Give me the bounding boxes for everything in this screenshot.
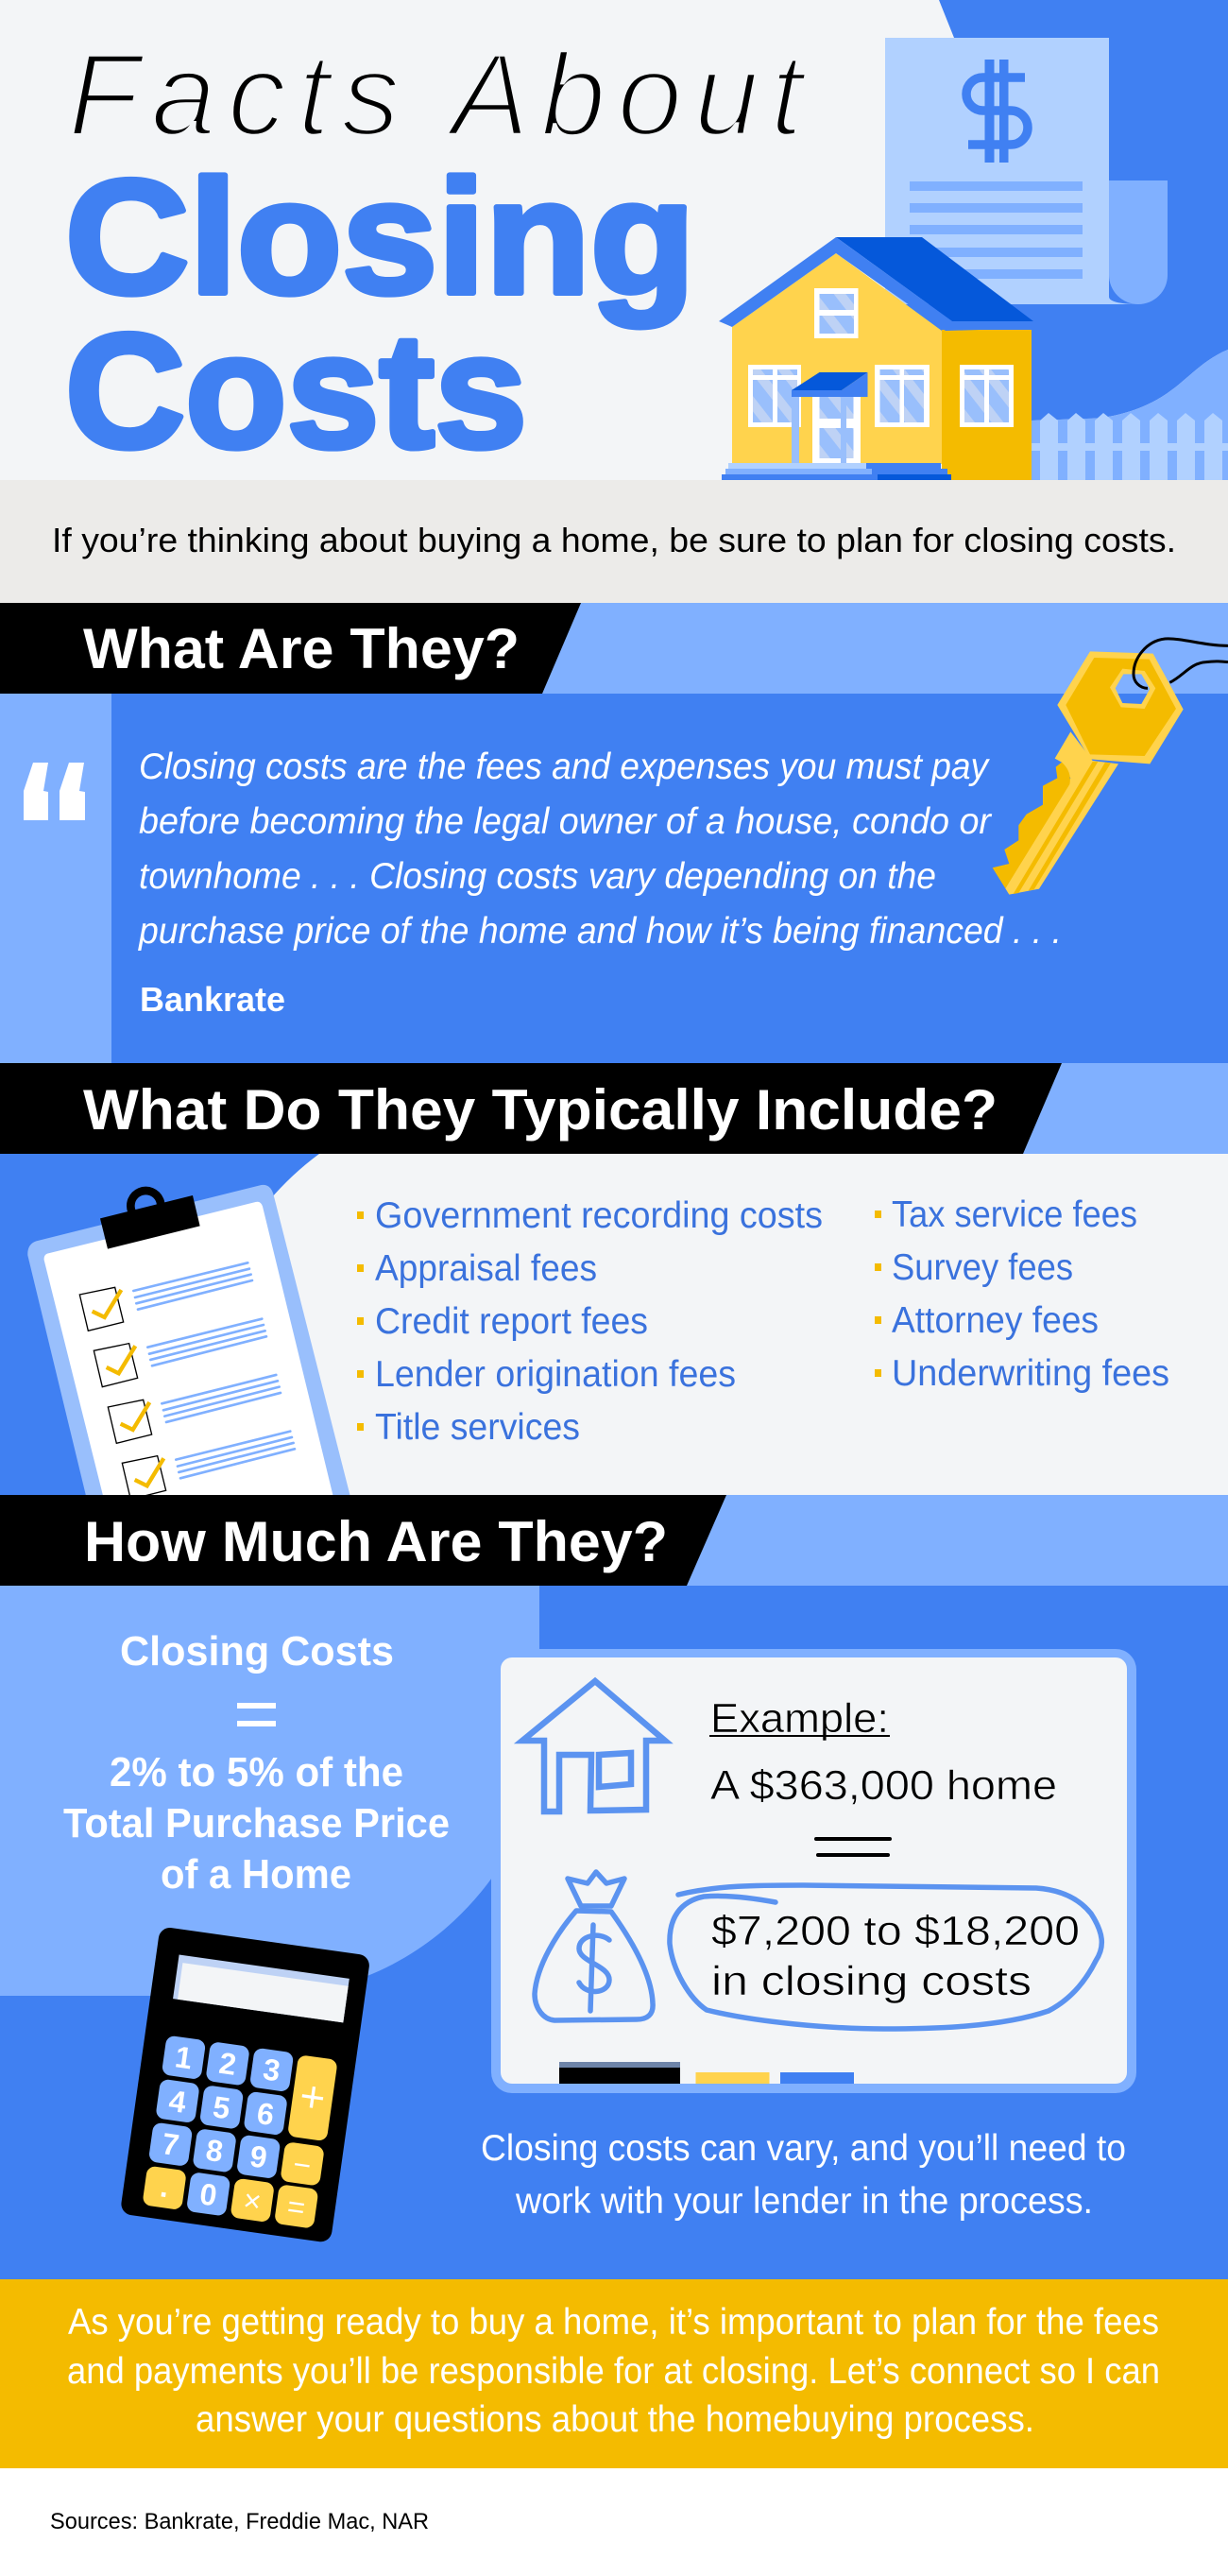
bullet list: left column: Government recording costs: [375, 1195, 823, 1236]
front door and porch: [792, 372, 867, 463]
section: what do they typically include: [0, 1063, 1228, 1531]
number keys: [142, 2035, 294, 2223]
icon: money bag: [535, 1872, 653, 2020]
quote text: Closing costs are the fees and expenses you must pay: [139, 747, 990, 787]
intro strip: [0, 480, 1228, 603]
bullet list: right column: Survey fees: [892, 1247, 1073, 1288]
key labels: 9: [247, 2138, 269, 2174]
checklist rows: [79, 1262, 252, 1331]
heading banner: What Are They?: [0, 603, 581, 694]
formula text: [63, 1628, 450, 1898]
key labels: 2: [217, 2046, 238, 2082]
upper window: [814, 288, 858, 338]
icon: yellow house: [719, 237, 1043, 480]
key labels: ×: [241, 2183, 264, 2219]
blue background blob: [850, 0, 1228, 421]
operator keys: [142, 2035, 338, 2229]
light blue ground shape: [1032, 350, 1228, 480]
handwritten equals: [816, 1839, 890, 1855]
quote text: [138, 747, 1062, 952]
key labels: 8: [204, 2133, 225, 2169]
porch steps: [722, 463, 951, 480]
caption: Closing costs can vary, and you’ll need to: [481, 2128, 1126, 2169]
title line: Costs: Costs: [65, 301, 527, 482]
header panel: [0, 0, 1228, 480]
title line: Closing: Closing: [65, 146, 695, 328]
bullet list: left column: Appraisal fees: [375, 1248, 597, 1289]
middle window: [875, 365, 930, 427]
formula text: 2% to 5% of the: [110, 1749, 403, 1795]
formula text: Closing Costs: [120, 1628, 394, 1674]
heading banner: How Much Are They?: How Much Are They?: [84, 1510, 668, 1573]
bullet list: right column: Attorney fees: [892, 1300, 1099, 1341]
bullet list: right column: Underwriting fees: [892, 1353, 1169, 1394]
formula text: of a Home: [161, 1851, 351, 1898]
key labels: 4: [167, 2084, 188, 2120]
bullet list: right column: Tax service fees: [892, 1194, 1137, 1235]
call to action text: answer your questions about the homebuying process.: [196, 2399, 1034, 2440]
bullet list: left column: Title services: [375, 1407, 580, 1448]
quote attribution: Bankrate: [140, 980, 285, 1019]
heading banner: What Do They Typically Include?: What Do They Typically Include?: [83, 1078, 998, 1142]
key labels: 1: [173, 2039, 195, 2075]
example price: A $363,000 home: [710, 1762, 1057, 1809]
call to action text: and payments you’ll be responsible for at closing. Let’s connect so I can: [67, 2351, 1160, 2392]
bullet list: left column: [357, 1195, 823, 1448]
key labels: 0: [197, 2176, 219, 2212]
example result: $7,200 to $18,200: [711, 1908, 1080, 1954]
call to action text: [67, 2302, 1160, 2440]
right window: [960, 365, 1014, 427]
bullet list: left column: Credit report fees: [375, 1301, 648, 1342]
quote text: purchase price of the home and how it’s being financed . . .: [138, 911, 1062, 952]
title line: Facts About: Facts About: [68, 30, 808, 161]
icon: picket fence: [1032, 413, 1228, 480]
bullet list: right column: [875, 1194, 1169, 1394]
icon: quotation mark: [24, 763, 85, 820]
key labels: 5: [211, 2089, 232, 2125]
key labels: 7: [160, 2126, 181, 2162]
example result: [711, 1908, 1080, 2004]
key labels: =: [285, 2189, 307, 2225]
example heading: Example:: [710, 1695, 889, 1742]
heading banner: What Do They Typically Include?: [0, 1063, 1228, 1154]
key labels: .: [158, 2169, 171, 2204]
icon: clipboard checklist: [27, 1185, 350, 1495]
intro sentence: If you’re thinking about buying a home, be sure to plan for closing costs.: [52, 521, 1176, 559]
bullet list: left column: Lender origination fees: [375, 1354, 736, 1395]
key labels: 3: [261, 2052, 282, 2087]
section: how much are they: [0, 1495, 1228, 2279]
example result: in closing costs: [711, 1958, 1032, 2004]
key labels: [154, 2039, 331, 2225]
call to action panel: [0, 2279, 1228, 2468]
caption: [481, 2128, 1126, 2222]
icon: sketched house: [522, 1681, 665, 1812]
quote text: townhome . . . Closing costs vary depending on the: [139, 856, 936, 897]
left window: [748, 365, 801, 427]
equals sign: [237, 1703, 276, 1726]
key labels: +: [297, 2070, 329, 2122]
sources: Sources: Bankrate, Freddie Mac, NAR: [50, 2509, 429, 2534]
caption: work with your lender in the process.: [515, 2181, 1093, 2222]
heading banner: How Much Are They?: [0, 1495, 726, 1586]
formula text: Total Purchase Price: [63, 1800, 450, 1846]
heading banner: What Are They?: What Are They?: [83, 617, 520, 680]
title: [65, 30, 808, 482]
icon: key: [993, 639, 1228, 895]
icon: calculator: [120, 1926, 370, 2243]
key labels: 6: [255, 2096, 276, 2132]
icon: bill document with dollar sign: [885, 38, 1168, 304]
whiteboard example: [491, 1649, 1136, 2093]
hand-drawn bubble: [670, 1885, 1101, 2029]
section: what are they: [0, 603, 1228, 1063]
key labels: −: [291, 2147, 314, 2183]
whiteboard tray items: [559, 2062, 854, 2084]
call to action text: As you’re getting ready to buy a home, it’s important to plan for the fees: [68, 2302, 1159, 2343]
quote text: before becoming the legal owner of a house, condo or: [139, 801, 993, 842]
